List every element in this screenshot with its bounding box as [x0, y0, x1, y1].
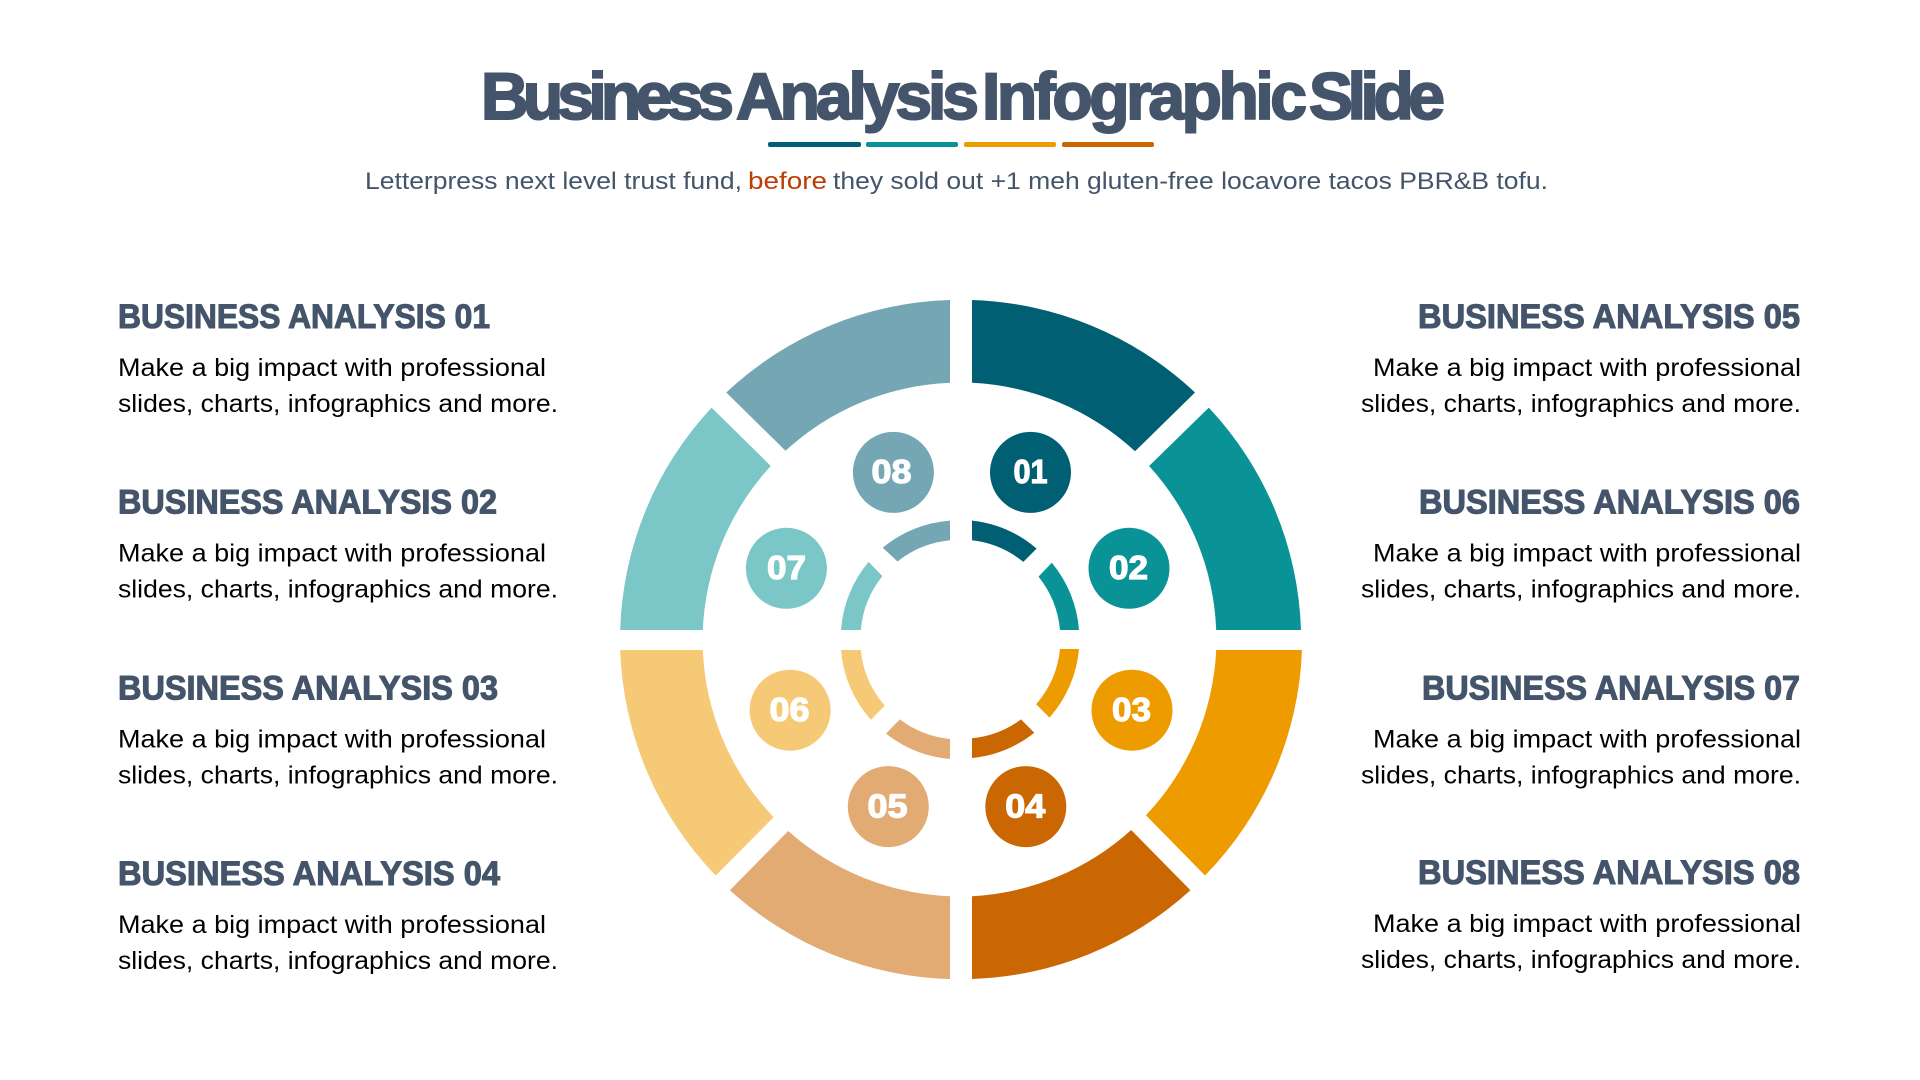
- right text block 07: Make a big impact with professional: [1373, 726, 1801, 754]
- right text block 08: [1361, 854, 1801, 974]
- outer segment 06: [620, 650, 774, 876]
- right text block 06: [1361, 484, 1801, 604]
- left text block 02: Make a big impact with professional: [118, 540, 546, 568]
- number badge 04: 04: [1005, 788, 1046, 824]
- number badge 01: 01: [1014, 453, 1048, 490]
- inner segment 07: [841, 562, 882, 630]
- right text block 06: BUSINESS ANALYSIS 06: [1419, 484, 1800, 522]
- left text block 04: [118, 855, 558, 975]
- right text block 08: slides, charts, infographics and more.: [1361, 946, 1801, 974]
- left text block 02: slides, charts, infographics and more.: [118, 576, 558, 604]
- right text block 07: slides, charts, infographics and more.: [1361, 762, 1801, 790]
- inner segment 02: [1038, 563, 1079, 630]
- left text block 01: slides, charts, infographics and more.: [118, 390, 558, 418]
- left text block 02: [118, 484, 558, 604]
- number badge 06: [750, 670, 831, 751]
- number badge 03: 03: [1112, 691, 1151, 728]
- outer segment 04: [972, 830, 1190, 979]
- right text block 08: BUSINESS ANALYSIS 08: [1418, 854, 1800, 892]
- title: Infographic: [982, 59, 1307, 133]
- number badge 05: [848, 766, 929, 847]
- left text block 02: BUSINESS ANALYSIS 02: [118, 484, 497, 522]
- left text block 01: Make a big impact with professional: [118, 354, 546, 382]
- outer segment 03: [1146, 650, 1302, 876]
- number badge 07: 07: [767, 549, 806, 586]
- number badge 08: 08: [872, 453, 912, 490]
- title: Business: [481, 59, 734, 133]
- number badge 02: 02: [1109, 549, 1148, 586]
- left text block 01: [118, 298, 558, 418]
- title: [481, 59, 1445, 133]
- left text block 04: slides, charts, infographics and more.: [118, 947, 558, 975]
- inner segment 01: [972, 521, 1037, 562]
- number badge 05: 05: [868, 788, 908, 824]
- right text block 05: [1361, 298, 1801, 418]
- inner segment 04: [972, 719, 1034, 758]
- subtitle: before: [748, 168, 827, 195]
- outer segment 08: [726, 300, 950, 451]
- title underline bars: [768, 142, 1154, 147]
- inner segment 05: [886, 719, 950, 759]
- inner segment 06: [841, 650, 885, 720]
- title: Slide: [1309, 59, 1445, 133]
- right text block 05: BUSINESS ANALYSIS 05: [1418, 298, 1800, 336]
- inner segment 03: [1036, 649, 1079, 718]
- outer segment 07: [620, 408, 771, 630]
- right text block 07: [1361, 670, 1801, 790]
- left text block 03: [118, 670, 558, 790]
- outer segment 02: [1149, 408, 1301, 630]
- left text block 03: BUSINESS ANALYSIS 03: [118, 670, 498, 708]
- number badge 04: [985, 766, 1066, 847]
- left text block 01: BUSINESS ANALYSIS 01: [118, 298, 490, 336]
- right text block 08: Make a big impact with professional: [1373, 910, 1801, 938]
- left text block 04: Make a big impact with professional: [118, 911, 546, 939]
- outer ring chart: [620, 300, 1302, 979]
- number badge 01: [990, 432, 1071, 513]
- number badge 06: 06: [770, 691, 810, 728]
- title: Analysis: [736, 59, 979, 133]
- left text block 03: slides, charts, infographics and more.: [118, 762, 558, 790]
- subtitle: [365, 168, 1548, 195]
- left text block 03: Make a big impact with professional: [118, 726, 546, 754]
- number badge 08: [853, 432, 934, 513]
- right text block 05: slides, charts, infographics and more.: [1361, 390, 1801, 418]
- outer segment 01: [972, 300, 1195, 451]
- outer segment 05: [730, 831, 950, 979]
- subtitle: they sold out +1 meh gluten-free locavore tacos PBR&B tofu.: [833, 168, 1548, 195]
- right text block 05: Make a big impact with professional: [1373, 354, 1801, 382]
- number badge 07: [746, 528, 827, 609]
- inner ring chart: [841, 521, 1079, 759]
- right text block 07: BUSINESS ANALYSIS 07: [1422, 670, 1800, 708]
- right text block 06: Make a big impact with professional: [1373, 540, 1801, 568]
- subtitle: Letterpress next level trust fund,: [365, 168, 742, 195]
- number badge 02: [1088, 528, 1170, 609]
- inner segment 08: [883, 521, 950, 562]
- left text block 04: BUSINESS ANALYSIS 04: [118, 855, 500, 893]
- number badge 03: [1092, 670, 1172, 751]
- right text block 06: slides, charts, infographics and more.: [1361, 576, 1801, 604]
